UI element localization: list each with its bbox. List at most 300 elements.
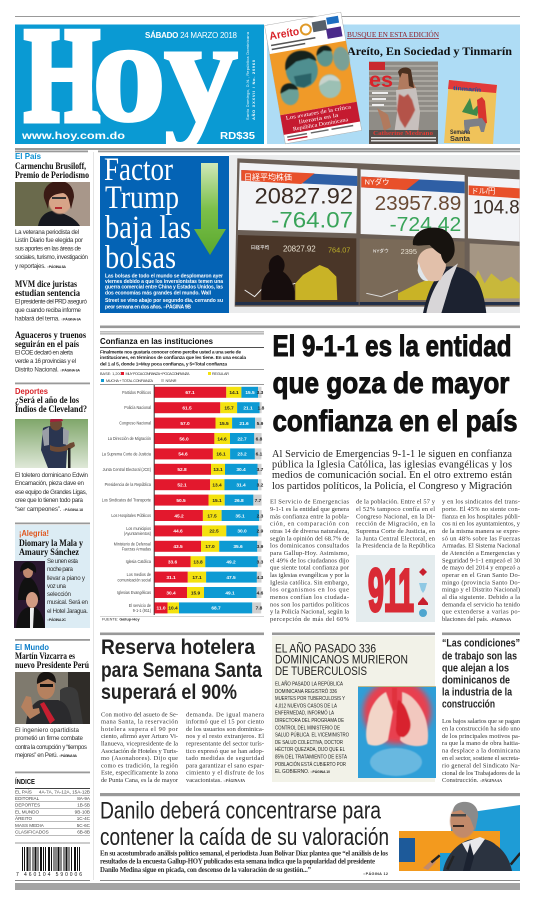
index table: 8A-9A [77,796,91,801]
text block: llevar a piano y [47,575,86,582]
board: NY Dow [361,169,465,238]
row: Policia Nacional: 61.5 [182,406,192,412]
text block [15,298,88,322]
row: Suprema Corte [102,448,263,459]
headline: nuevo Presidente Perú [15,660,89,670]
row: Hospitales: 2.3 [257,513,264,519]
body column 1: Iglesia católica. Sin embargo, [270,579,349,586]
body column 1: según la opinión del 68.7% de [270,535,349,542]
body column 1: mana Santa, la reservación [101,719,179,726]
photo: Diomary and Amaury [14,561,45,628]
section label: Deportes [15,386,48,396]
row: Ministerio de Defensa: 17.0 [205,544,215,550]
headline [15,330,86,349]
story text: DIRECTORA DEL PROGRAMA DE [275,718,344,724]
row: Municipios [124,525,264,536]
row: Partidos Politicos: 15.5 [245,390,255,396]
body column 3: de la misma manera se expre- [442,528,520,535]
body column 2: tico expresó que se han adop- [186,748,264,755]
row: Hospitales: Los Hospitales Públicos [111,513,151,518]
image: 911 [356,555,435,624]
main story deck: pública la Iglesia Católica, las iglesias evangélicas y los [272,460,512,471]
logo: Hoy [24,28,238,144]
row: Direccion de Migracion: 56.0 [179,436,189,442]
body column 2: demanda. De igual manera [186,711,264,718]
text block: voz una [47,583,67,590]
headline: contener la caída de su valoración [100,824,389,851]
main story deck: medios de comunicación social. En el otro extremo están [272,470,512,481]
magazine cover: En Sociedad: Catherine Medrano [373,131,433,137]
story: Reserva hotelera [101,636,265,784]
summary text: guerra comercial entre China y Estados Unidos, las [105,285,223,291]
summary text: peor semana en dos años. ○PÁGINA 9B [105,304,191,310]
story text: MUERTES POR TUBERCULOSIS Y [275,696,345,702]
story text: en el sector, sostiene el secreta- [442,755,520,762]
body column 3 [442,499,521,623]
barcode [16,859,82,878]
body column 1: de Punta Cana, es la de mayor [101,777,179,784]
row: Junta Central Electoral: 3.7 [257,467,264,473]
headline: dominicanos de [442,674,510,686]
index table: 4A-7A, 7A-12A, 15A-12B [39,790,90,794]
row: Medios [118,572,264,583]
row: Municipios: 22.5 [209,529,219,535]
row: Medios: Los medios de [127,572,152,577]
legend [100,372,229,383]
body column 2 [356,499,436,550]
row: Medios: 17.1 [192,575,202,581]
bottom rules [15,880,520,890]
headline: Trump [105,180,179,216]
headline [104,152,191,276]
headline: Factor [104,152,173,188]
chart source: FUENTE: Gallup-Hoy [102,618,140,622]
chart intro: del 1 al 5, donde 1=Muy poca confianza, y 5=Total confianza [100,362,227,368]
row: Iglesias Evangelicas: 49.1 [225,590,235,596]
row: Hospitales [111,510,264,521]
body column 1: Con motivo del asueto de Se- [101,711,178,718]
panel: Factor Trump [100,152,229,313]
body column 1: percepción de más del 60% [270,616,350,623]
row: Junta Central Electoral: 13.1 [213,467,223,473]
body column 1: las iglesias evangélicas y por la [270,572,349,579]
index table: 6B-8B [77,830,90,834]
index table: EL MUNDO [15,810,40,814]
headline: Aguaceros y truenos [15,330,86,340]
headline: Indios de Cleveland? [15,404,87,414]
row: Iglesia Catolica: 13.8 [193,560,203,566]
summary text: Las bolsas de todo el mundo se desplomaron ayer [105,274,223,280]
index table: EL PAÍS [15,788,32,794]
story text: de los principales motivos pa- [442,733,520,740]
text block: selección [47,591,72,598]
text block [47,558,89,622]
headline: Danilo deberá concentrarse para [100,798,382,824]
text block [15,727,87,759]
row: Municipios: 44.6 [173,529,183,535]
headline [15,651,89,670]
text block: verde a 16 provincias y el [15,358,76,365]
body column 2: de la población. Entre el 57 y [356,499,436,506]
body column 1 [101,711,179,784]
row: Congreso Nacional: 57.0 [180,421,190,427]
story text [275,680,349,775]
story text: resultados de la encuesta Gallup-HOY publicados esta semana indica que la popularidad del presidente [100,858,375,866]
row: Partidos Politicos: 67.1 [185,390,195,396]
magazine cover: Areito [264,12,362,144]
body column 1: hotelera supera el 90 por [101,726,179,733]
text block: y reportajes. ○PÁGINA 8A [15,263,66,270]
body column 3: Seguridad 9-1-1 empezó el 30 [442,557,520,564]
man in mask [413,228,486,313]
summary text: Street se vino abajo por segundo día, cerrando su [105,298,223,304]
legend: REGULAR [212,372,229,376]
main story deck [272,449,512,492]
row: Congreso Nacional: 5.9 [257,421,264,427]
index table: MASS MEDIA [15,823,45,828]
row: 9-1-1: 11.0 [156,606,166,612]
row: Medios: 47.5 [226,575,236,581]
body column 2: de los usuarios son dominica- [186,726,264,733]
chart title: Confianza en las instituciones [100,336,213,346]
row: Partidos Politicos: 3.3 [257,390,264,396]
body column 1: 9-1-1 es la entidad que genera [270,506,349,513]
body column 1: nos son los partidos políticos [270,601,350,608]
row: Policia Nacional [124,402,265,413]
chart intro: instituciones, en términos de confianza que les tiene. En una escala [100,355,246,361]
text block: El presidente del PRD aseguró [15,298,88,306]
row: Suprema Corte: 23.2 [237,452,247,458]
row: Policia Nacional: Policía Nacional [124,405,151,410]
row: Sindicatos: 7.7 [255,498,262,504]
body column 3: blaciones del país. ○PÁGINA 6A [442,616,511,623]
text block: ○PÁGINA 2C [47,617,66,622]
row: Ministerio de Defensa: 35.6 [233,544,243,550]
row: Sindicatos [102,495,262,506]
story text [100,850,388,876]
lower chart screens: NYダウ [373,248,389,255]
body column 1: El Servicio de Emergencias [270,499,350,506]
text block: sociales, turismo, investigación [15,254,89,261]
row: Junta Central Electoral [103,464,264,475]
body column 3: mingo (provincia Santo Do- [442,579,520,586]
website: www.hoy.com.do [21,130,125,142]
text block: El ingeniero opartidista [15,727,80,734]
index table: 5C-6C [77,823,91,828]
board: Nikkei: 日経平均株価 [244,172,292,182]
text block: Distrito Nacional. ○PÁGINA 6A [15,366,80,374]
headline: seguirán en el país [15,339,79,349]
row: Medios: comunicación social [118,577,151,583]
row: Sindicatos: 15.1 [212,498,222,504]
cover portraits [274,42,356,107]
place, vertical: Santo Domingo, D.N., República Dominicana [245,31,250,120]
row: 9-1-1: 9-1-1 (911) [133,608,151,613]
story text: CONTROL DEL MINISTERIO DE [275,725,340,731]
row: Sindicatos: Los Sindicatos del Transporte [102,497,152,503]
index table: 9B-10B [75,810,90,814]
legend: MUY POCA CONFIANZA + POCA CONFIANZA [126,372,190,376]
row: 9-1-1: 7.8 [256,606,263,612]
row: Congreso Nacional [119,418,264,429]
body column 3: de Atención a Emergencias y [442,550,521,557]
lower chart screens: 764.07 [328,246,350,255]
row: Junta Central Electoral: 30.4 [236,467,246,473]
section label: El Mundo [15,642,49,652]
headline: estudian sentencia [15,288,80,298]
panel: tuberculosis [272,636,436,782]
row: Presidencia [105,479,264,490]
arrow: down [194,163,226,255]
story: Danilo [100,798,521,876]
row: Iglesia Catolica: 3.3 [257,560,264,566]
row: Municipios: Los municipios [126,525,151,531]
body column 3: porte. El 45% no siente con- [442,506,520,513]
text block: noche para [47,566,74,573]
body column 1: menos confían los ciudada- [270,594,349,601]
row: Ministerio de Defensa [114,541,264,552]
body column 2: para garantizar el sano espar- [186,762,264,769]
photo: Danilo Medina [399,802,521,871]
summary text: viernes debido a que los inversionistas temen una [105,279,223,285]
row: Iglesia Catolica: Iglesia Católica [126,559,152,564]
headline [15,395,87,414]
headline: construcción [442,698,495,710]
left column: El Pais [15,151,90,270]
row: Partidos Politicos: 14.1 [229,390,239,396]
headline [19,538,83,557]
board: Nikkei [238,163,357,233]
row: Iglesias Evangelicas [117,587,264,598]
promo kicker: BUSQUE EN ESTA EDICIÓN [347,29,440,39]
row: Suprema Corte: 6.1 [256,452,263,458]
barcode: 7 460104 590006 [16,872,82,878]
row: Direccion de Migracion: 14.6 [217,436,227,442]
body column 1: ciento, afirmó ayer Arturo Vi- [101,733,178,740]
body column 2: cimiento y el disfrute de los [186,770,264,777]
row: Iglesias Evangelicas: 4.6 [257,590,264,596]
magazine cover: Tinmarin: Semana [450,130,471,136]
text block: Se unen esta [47,558,79,565]
body column 1: para Gallup-Hoy. Asimismo, [270,550,349,557]
story text: DE SALUD COLECTIVA, DOCTOR [275,740,343,746]
headline: que alejan a los [442,662,509,674]
row: Congreso Nacional: 15.5 [219,421,229,427]
row: Partidos Politicos: Partidos Políticos [122,389,151,395]
image: lungs [358,680,436,778]
headline: bolsas [105,240,176,276]
body column 1: Asociación de Hoteles y Turis- [101,748,178,755]
magazine cover: En Sociedad: es [369,69,393,92]
text block: Encarnación, pieza clave en [15,480,85,487]
chart intro: Finalmente nos gustaría conocer cómo percibe usted a una serie de [100,349,241,355]
photo: player [15,416,88,468]
story text: EL AÑO PASADO LA REPÚBLICA [275,680,343,688]
row: Hospitales: 17.5 [207,513,217,519]
image: 911: 911 [368,557,414,624]
row: Medios: 4.3 [257,575,264,581]
row: Iglesias Evangelicas: 15.9 [191,590,200,596]
text block: musical. Será en [47,599,89,606]
story text: Danilo Medina sigue en picada, con descenso de la valoración de su gestión...” [100,867,312,874]
text block: prometió un firme combate [15,735,84,742]
body column 3: Armadas. El Sistema Nacional [442,543,520,550]
lower chart screens: 2395 [401,247,417,256]
left column: Aguaceros [15,330,86,374]
headline [442,638,520,710]
row: Municipios: 30.0 [237,529,247,535]
story text: en la construcción ha sido uno [442,725,520,732]
body column 3: al día siguiente. Debido a la [442,594,520,601]
index table: ÁREITO [15,815,32,821]
headline: DOMINICANOS MURIERON [275,652,408,666]
body column 2: vacacionistas. ○PÁGINA 8A [186,777,245,784]
body column 2: el 52% tampoco confía en el [356,506,435,513]
body column 2 [186,711,265,784]
section rules [100,632,520,635]
row: Policia Nacional: 21.1 [243,406,253,412]
body column 2: Suprema Corte de Justicia, en [356,528,436,535]
row: Congreso Nacional: 21.6 [239,421,249,427]
text block [15,472,89,513]
row: Municipios: (Ayuntamientos) [124,531,151,536]
row: Ministerio de Defensa: Fuerzas Armadas [122,546,151,552]
story text: HÉCTOR QUEZADA, DIJO QUE EL [275,746,345,753]
row: Direccion de Migracion: 6.8 [256,436,263,442]
headline: superará el 90% [101,681,237,704]
row: Medios: 31.1 [166,575,176,581]
row: Presidencia: 3.2 [257,483,264,489]
body column 1: ción, en comparación con [270,521,350,528]
story text: cional de los Trabajadores de la [442,770,520,777]
text block: La veterana periodista del [15,229,79,236]
text block: mejores” en Perú. ○PÁGINA 9A [15,752,77,759]
row: Sindicatos: 50.5 [176,498,186,504]
headline: Amaury Sánchez [19,547,79,557]
body column 2: Congreso Nacional, en la Di- [356,513,435,520]
text block: hablará del tema. ○PÁGINA 6A [15,316,81,322]
panel: edition promo [267,24,520,144]
body column 2: la Junta Central Electoral, en [356,535,436,542]
body column 3: y en los sindicatos del trans- [442,499,520,506]
text block: El toletero dominicano Edwin [15,472,89,479]
story text: DOMINICANA REGISTRÓ 336 [275,688,337,695]
magazine cover: Tinmarin: Santa [450,136,470,143]
body column 1: los dominicanos consultados [270,543,350,550]
headline [275,642,408,678]
story: Las condiciones [442,638,521,784]
row: 9-1-1: 10.4 [168,606,178,612]
text block: Listín Diario fue elegida por [15,237,83,244]
price: RD$35 [220,130,255,142]
body column 1: otras 14 de diversa naturaleza, [270,528,349,535]
photo: Carmenchu [15,181,90,226]
panel: Alegria [14,525,90,628]
body column 2: nos y el resto extranjeros. El [186,733,264,740]
row: Direccion de Migracion [108,433,263,444]
long rule above main story [100,326,520,328]
row: Junta Central Electoral: 52.8 [177,467,187,473]
edition number: AÑO XXXVII / No. 20960 [251,60,256,120]
row: Suprema Corte: 16.1 [216,452,226,458]
body column 2: representante del sector turís- [186,740,264,748]
headline: Carmenchu Brusiloff, [15,161,86,171]
story text [442,718,521,784]
row: Ministerio de Defensa: 43.5 [173,544,183,550]
headline: de trabajo son las [442,650,517,662]
row: 9-1-1: 68.7 [211,606,221,612]
chart panel: Confianza en las instituciones [100,332,265,622]
row: Presidencia: 13.4 [212,483,222,489]
story text: ra que la mano de obra haitia- [442,740,520,747]
summary text [105,274,223,310]
photo: stock market boards [229,155,522,313]
board: dollar yen: 104.8 [473,197,520,218]
board: NY Dow: 23957.89 [375,192,461,215]
row: Policia Nacional: 1.8 [258,406,265,412]
headline: Diomary la Mala y [19,538,83,548]
index table: EDITORIAL [15,796,40,801]
headline [15,279,80,298]
row: Iglesias Evangelicas: Iglesias Evangélicas [117,590,151,595]
lower chart screens: 20827.92 [283,244,316,253]
body column 1: más confianza entre la pobla- [270,513,349,520]
left column: MVM [15,279,88,322]
logo: Hoy: H [24,2,100,150]
row: Hospitales: 35.1 [235,513,245,519]
section label: El País [15,151,41,161]
headline: Premio de Periodismo [15,170,89,180]
row: Municipios: 2.9 [257,529,264,535]
headline: ¿Será el año de los [15,395,79,405]
masthead panel [15,24,264,144]
body column 3: fianza en los hospitales públi- [442,513,520,520]
photo: Vizcarra [15,672,90,724]
left column: El Mundo [15,642,90,759]
headline: baja las [105,210,191,246]
index table: CLASIFICADOS [15,830,49,834]
index heading: ÍNDICE [15,777,35,786]
row: Iglesia Catolica: 49.2 [226,560,236,566]
board: Nikkei: 20827.92 [255,183,353,208]
story text: EL GOBIERNO. ○PÁGINA 10 [275,769,330,775]
magazine cover: Areito: Los avatares de la crítica [285,104,352,122]
magazine cover: Areito: literaria en la [298,113,340,126]
legend: NS/NR [166,379,177,383]
text block: cree que lo tienen todo para [15,497,84,504]
row: 9-1-1 [129,602,263,613]
text block: que cuando reciba informe [15,307,82,314]
headline: Martín Vizcarra es [15,651,75,661]
story text: 85% DEL TRATAMIENTO DE ESTA [275,754,347,760]
text block: El COE declaró en alerta [15,350,74,356]
body column 3: demanda el servicio ha tenido [442,601,520,608]
body column 1: como es tradición, la región [101,762,179,769]
row: Sindicatos: 26.8 [234,498,244,504]
headline [101,636,262,704]
row: Iglesias Evangelicas: 30.4 [166,590,176,596]
body column 1: mo (Asonahores). Dijo que [101,755,178,762]
headline: la industria de la [442,686,513,698]
headline: EL AÑO PASADO 336 [275,642,376,656]
row: Iglesia Catolica: 33.6 [168,560,177,566]
body column 2: informó que el 15 por ciento [186,719,264,726]
row: Ministerio de Defensa: 3.9 [257,544,264,550]
row: Policia Nacional: 15.7 [224,406,234,412]
headline: Reserva hotelera [101,636,255,659]
row: Direccion de Migracion: 22.7 [237,436,247,442]
body column 1: llanueva, vicepresidente de la [101,740,178,748]
